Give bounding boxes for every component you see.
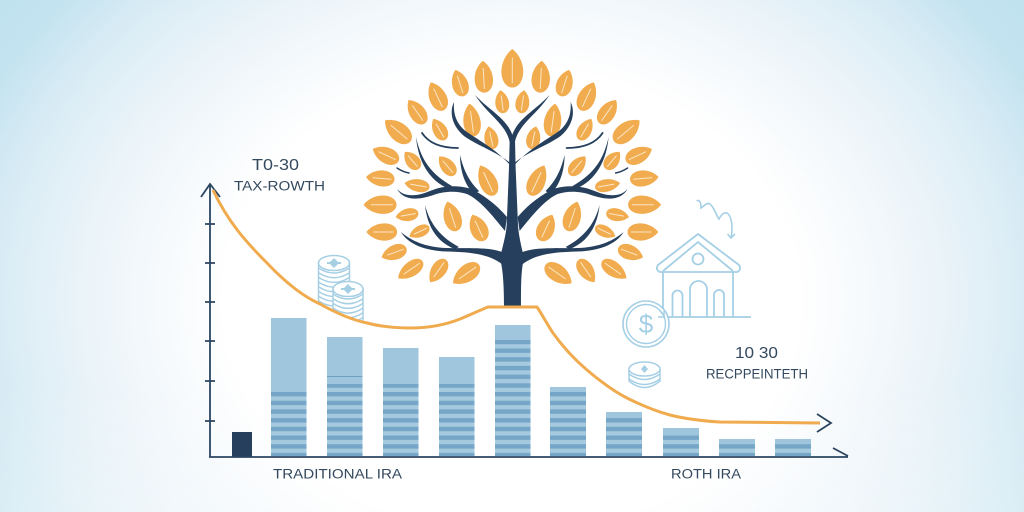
leaves: left half: [364, 60, 510, 290]
branches: left half: [397, 95, 513, 265]
label: TAX-ROWTH: TAX-ROWTH: [234, 178, 325, 194]
icon: dollar coin: $: [639, 309, 654, 339]
bar 9: [719, 439, 755, 456]
tree: [364, 49, 661, 307]
bar 3: [383, 348, 418, 456]
bar 7: [606, 412, 642, 456]
bar 10: [775, 439, 811, 456]
icon: squiggle arrow: [697, 200, 735, 238]
bar 6: [550, 387, 586, 456]
label: 10 30: 10 30: [735, 345, 778, 362]
bar chart: [232, 318, 811, 456]
icon: dollar coin: [623, 301, 669, 347]
trunk: [500, 135, 524, 307]
bar 4: [439, 357, 474, 456]
icon: small coin stack: [629, 362, 660, 388]
stacked coins behind curve: [318, 256, 363, 325]
leaves: right half: [514, 60, 661, 290]
background bottom fade: [0, 380, 1024, 512]
orange trend curve: [213, 190, 820, 423]
dark starter bar: [232, 432, 252, 456]
bar 5: [495, 325, 530, 456]
bar 2: [327, 337, 362, 456]
curve arrowhead: [817, 414, 831, 432]
branches: right half: [512, 95, 628, 265]
axes: [201, 184, 848, 457]
label: TRADITIONAL IRA: TRADITIONAL IRA: [273, 466, 402, 482]
icon: bank house: [657, 234, 751, 317]
top centre leaf: [501, 49, 523, 88]
label: T0-30: T0-30: [252, 157, 299, 174]
label: ROTH IRA: ROTH IRA: [671, 466, 741, 482]
bar 1: [271, 318, 306, 456]
bar 8: [663, 428, 699, 456]
label: RECPPEINTETH: RECPPEINTETH: [706, 366, 808, 382]
